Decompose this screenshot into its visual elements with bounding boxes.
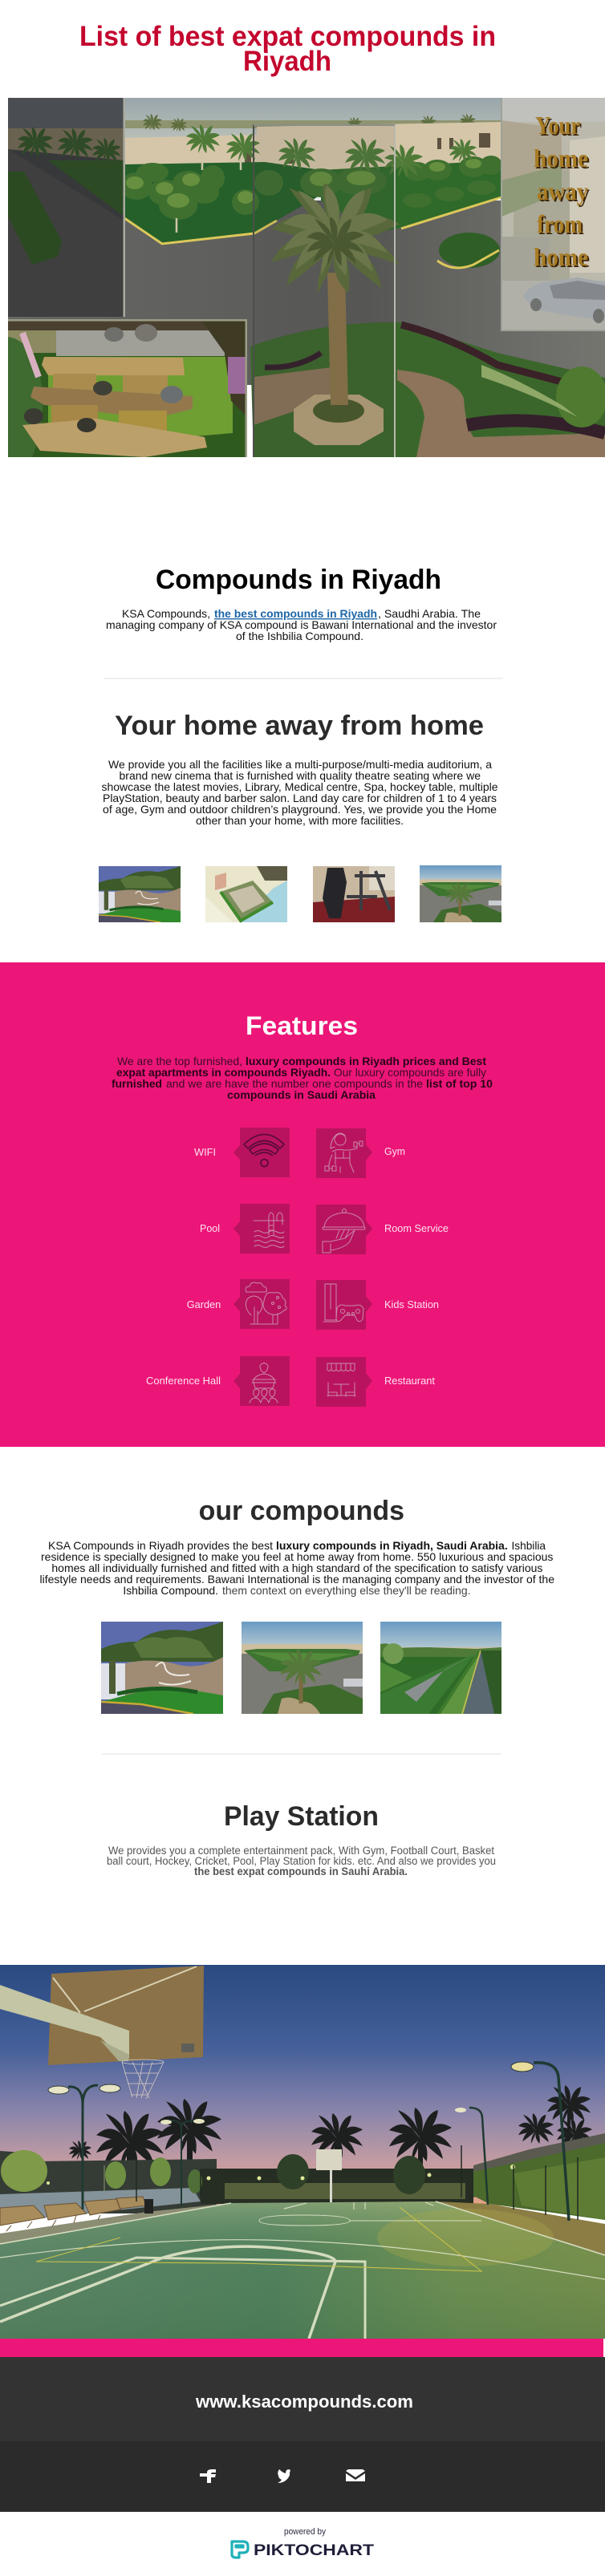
text block: our compounds — [40, 1539, 554, 1597]
title: Riyadh — [243, 46, 331, 77]
text block: intro: KSA Compounds, — [122, 607, 210, 620]
stone sculpture inset photo — [8, 319, 247, 457]
heading: our compounds: our compounds — [199, 1496, 404, 1526]
thumbnail: gym — [313, 866, 395, 922]
feature: Pool — [200, 1204, 290, 1254]
feature: Garden — [187, 1279, 290, 1329]
text block: facilities: other than your home, with more facilities. — [196, 814, 404, 827]
center translucent panel — [253, 124, 396, 457]
text block: facilities: brand new cinema that is furnished with quality theatre seating where we — [119, 769, 481, 782]
right light panel — [501, 98, 605, 331]
benches — [0, 2197, 153, 2231]
feature: Gym: Gym — [384, 1145, 405, 1157]
text block: features intro: compounds in Saudi Arabia — [227, 1088, 376, 1101]
footer: website band: www.ksacompounds.com — [195, 2392, 413, 2412]
text block: features intro: list of top 10 — [426, 1077, 493, 1090]
overlay slogan text: from — [538, 211, 584, 240]
pink strip — [0, 2339, 603, 2357]
text block: our compounds: lifestyle needs and requirements. Bawani International is the managing company and the investor of the — [40, 1573, 554, 1586]
footer: social band — [0, 2441, 605, 2512]
powered by label: powered by — [284, 2527, 326, 2537]
thumbnail row — [99, 865, 501, 922]
feature: Conference Hall: Conference Hall — [146, 1375, 221, 1387]
text block: facilities: of age, Gym and outdoor children’s playground. Yes, we provide you the Home — [103, 803, 497, 816]
feature: Restaurant: Restaurant — [384, 1375, 435, 1387]
basketball court photo — [0, 1965, 605, 2339]
thumbnail: aerial view — [420, 865, 501, 922]
palm silhouettes — [69, 2085, 592, 2201]
background fence and buildings — [0, 2133, 605, 2222]
text block: facilities: showcase the latest movies, Library, Medical centre, Spa, hockey table, multiple — [101, 780, 498, 793]
text block: play station: We provides you a complete entertainment pack, With Gym, Football Court, Basket — [108, 1845, 494, 1857]
overlay slogan text: away — [537, 176, 588, 205]
feature: Room Service — [316, 1205, 449, 1254]
text block: features intro — [112, 1055, 493, 1101]
text block: our compounds: luxury compounds in Riyadh, Saudi Arabia. — [276, 1539, 508, 1552]
text block: facilities — [101, 758, 498, 827]
text block: intro: the best compounds in Riyadh — [214, 607, 377, 620]
feature: Restaurant — [316, 1357, 435, 1407]
overlay slogan text: from — [537, 209, 583, 238]
panel: features — [0, 962, 605, 1447]
icon: mail — [346, 2469, 365, 2481]
text block: features intro: expat apartments in compounds Riyadh. — [116, 1066, 331, 1079]
text block: facilities: PlayStation, beauty and barber salon. Land day care for children of 1 to 4 years — [103, 792, 497, 804]
text block: features intro: We are the top furnished, — [117, 1055, 242, 1067]
feature: Pool: Pool — [200, 1222, 220, 1234]
title: List of best expat compounds in — [79, 21, 496, 52]
overlay slogan text — [534, 111, 590, 273]
text block: our compounds: Ishbilia — [512, 1539, 546, 1552]
text block: play station: the best expat compounds in Sauhi Arabia. — [194, 1865, 408, 1877]
photo: aerial junction — [242, 1622, 363, 1714]
text block: features intro: luxury compounds in Riyadh prices and Best — [246, 1055, 486, 1067]
text block: intro: of the Ishbilia Compound. — [236, 630, 363, 642]
logo: Piktochart: PIKTOCHART — [254, 2542, 374, 2559]
overlay slogan text: home — [535, 145, 590, 174]
text block: our compounds: them context on everything else they'll be reading. — [222, 1584, 470, 1597]
overlay slogan text: Your — [535, 111, 580, 140]
feature: Gym — [316, 1128, 405, 1178]
icon: twitter — [278, 2469, 290, 2483]
feature: Garden: Garden — [187, 1298, 221, 1310]
overlay slogan text: home — [534, 144, 588, 172]
text block: play station: ball court, Hockey, Cricket, Pool, Play Station for kids. etc. And also we provides you — [107, 1855, 496, 1867]
feature: WIFI: WIFI — [194, 1146, 216, 1158]
photo: Ishbilia entrance — [101, 1622, 223, 1714]
overlay slogan text: away — [538, 178, 590, 207]
text block: our compounds: homes all individually furnished and fitted with a high standard of the specification to satisfy various — [51, 1561, 542, 1574]
logo: Piktochart — [232, 2542, 374, 2559]
text block: features intro: Our luxury compounds are fully — [334, 1066, 486, 1079]
feature: Room Service: Room Service — [384, 1222, 449, 1234]
feature: Kids Station — [316, 1280, 439, 1330]
title — [79, 21, 496, 77]
feature: WIFI — [194, 1128, 290, 1177]
photo: avenue — [380, 1622, 501, 1714]
text block: features intro: furnished — [112, 1077, 162, 1090]
hero photo collage — [8, 98, 605, 457]
overlay slogan text: Your — [537, 112, 582, 141]
feature: Kids Station: Kids Station — [384, 1298, 439, 1310]
heading: Play Station: Play Station — [224, 1801, 379, 1832]
text block: features intro: and we are have the number one compounds in the — [166, 1077, 423, 1090]
thumbnail: lobby — [205, 866, 287, 922]
text block: our compounds: KSA Compounds in Riyadh provides the best — [48, 1539, 273, 1552]
photo row: compounds — [101, 1622, 501, 1714]
icon: facebook — [200, 2469, 216, 2483]
text block: play station — [107, 1845, 496, 1877]
heading: Your home away from home: Your home away from home — [115, 711, 484, 741]
footer: website band — [0, 2357, 605, 2441]
text block: our compounds: residence is specially designed to make you feel at home away from home. 550 luxurious and spacious — [41, 1550, 553, 1563]
text block: our compounds: Ishbilia Compound. — [123, 1584, 218, 1597]
text block: intro: , Saudhi Arabia. The — [378, 607, 481, 620]
feature: Conference Hall — [146, 1356, 290, 1406]
overlay slogan text: home — [535, 244, 590, 273]
thumbnail: entrance wall — [99, 866, 181, 922]
lamp posts — [48, 2062, 578, 2221]
heading: Features: Features — [246, 1011, 358, 1040]
overlay slogan text: home — [534, 242, 588, 271]
text block: intro — [106, 607, 497, 642]
backboard and hoop — [0, 1966, 204, 2099]
text block: facilities: We provide you all the facilities like a multi-purpose/multi-media auditorium, a — [108, 758, 492, 771]
court surface — [0, 2201, 605, 2339]
heading: Compounds in Riyadh: Compounds in Riyadh — [156, 565, 441, 595]
text block: intro: managing company of KSA compound is Bawani International and the investor — [106, 618, 497, 631]
left dark overlay panel — [8, 98, 125, 317]
